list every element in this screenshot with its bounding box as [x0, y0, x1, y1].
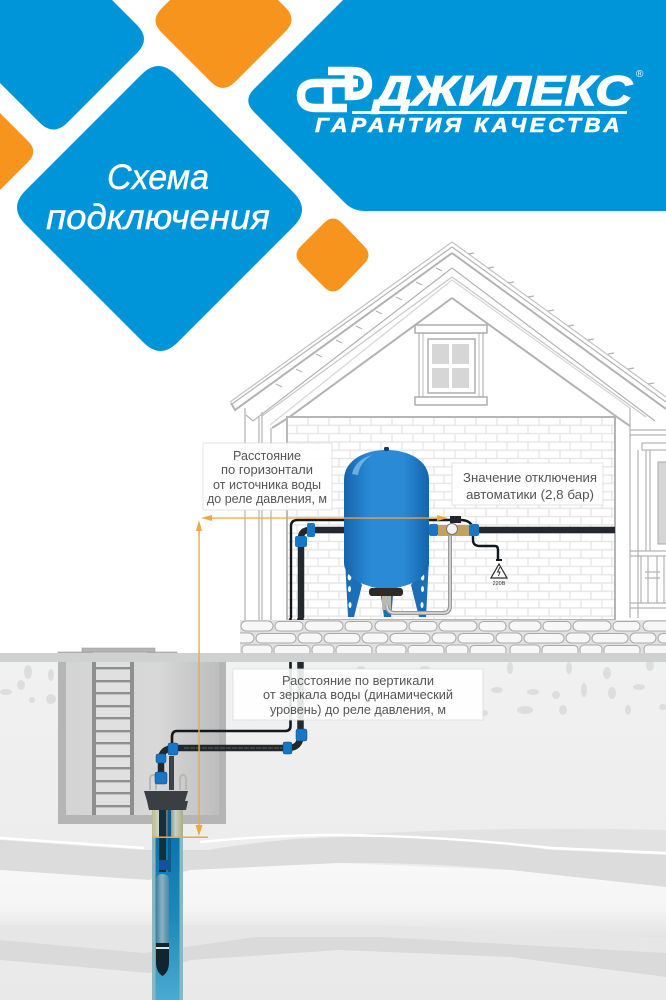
callout: horizontal distance: [203, 443, 332, 510]
arrow: vertical distance: [152, 520, 208, 838]
dormer window: [415, 325, 487, 405]
tank legs: [345, 560, 429, 617]
title: подключения: [46, 198, 270, 237]
pipe couplers: [155, 729, 307, 784]
left porch column: [245, 408, 287, 620]
pressure switch fitting: [429, 516, 479, 536]
panel: house: [230, 242, 666, 620]
soil speckles: [0, 659, 666, 716]
pipes from house to well: [155, 618, 307, 790]
title: Схема: [107, 158, 209, 197]
ground layers: [0, 659, 666, 1000]
stone foundation: [240, 620, 666, 656]
icon: voltage warning: [491, 559, 507, 587]
callout: horizontal distance: от источника воды: [213, 477, 321, 492]
arrow: horizontal distance: [201, 515, 448, 521]
callout: horizontal distance: по горизонтали: [221, 462, 313, 477]
pit lid: [58, 648, 177, 656]
panel: top-left blue diamond: [0, 0, 144, 130]
panel: top orange diamond: [156, 0, 292, 88]
callout: horizontal distance: до реле давления, м: [207, 491, 327, 506]
callout: shutoff value: [452, 463, 603, 505]
roof: [230, 242, 666, 428]
right pipe: [478, 527, 615, 533]
logo wordmark: ®: [636, 69, 644, 80]
callout: shutoff value: Значение отключения: [463, 470, 597, 485]
tank body: [344, 450, 429, 589]
tank cap: [369, 588, 403, 596]
panel: title diamond with heading: [17, 66, 302, 351]
right porch: [630, 408, 666, 618]
logo wordmark: ДЖИЛЕКС: [371, 67, 633, 114]
submersible pump: [156, 860, 169, 976]
icon: logo symbol: [301, 71, 368, 108]
silver hose: [387, 536, 450, 613]
callout: horizontal distance: Расстояние: [233, 448, 301, 463]
title: [46, 158, 270, 237]
callout: shutoff value: автоматики (2,8 бар): [466, 487, 594, 502]
left pipe: [301, 530, 345, 618]
ladder: [92, 662, 134, 815]
brick wall: [287, 417, 615, 620]
panel: expansion tank unit: [291, 447, 615, 618]
ground top band: [0, 653, 666, 662]
left couplers: [295, 523, 315, 547]
panel: left orange diamond: [0, 113, 33, 190]
panel: pit with ladder: [58, 648, 226, 824]
panel: well with pump: [144, 775, 188, 1000]
well head: [144, 775, 188, 810]
logo wordmark: [315, 67, 644, 137]
callout: vertical distance: от зеркала воды (динамический: [263, 687, 453, 702]
callout: vertical distance: Расстояние по вертикали: [282, 673, 434, 688]
callout: vertical distance: [233, 669, 483, 720]
cable along wall: [291, 520, 498, 618]
icon: voltage warning: 220В: [493, 581, 506, 587]
callout: vertical distance: уровень) до реле давления, м: [270, 702, 446, 717]
logo wordmark: ГАРАНТИЯ КАЧЕСТВА: [315, 115, 623, 137]
panel: logo banner: [248, 0, 666, 211]
panel: small orange diamond: [296, 218, 368, 292]
